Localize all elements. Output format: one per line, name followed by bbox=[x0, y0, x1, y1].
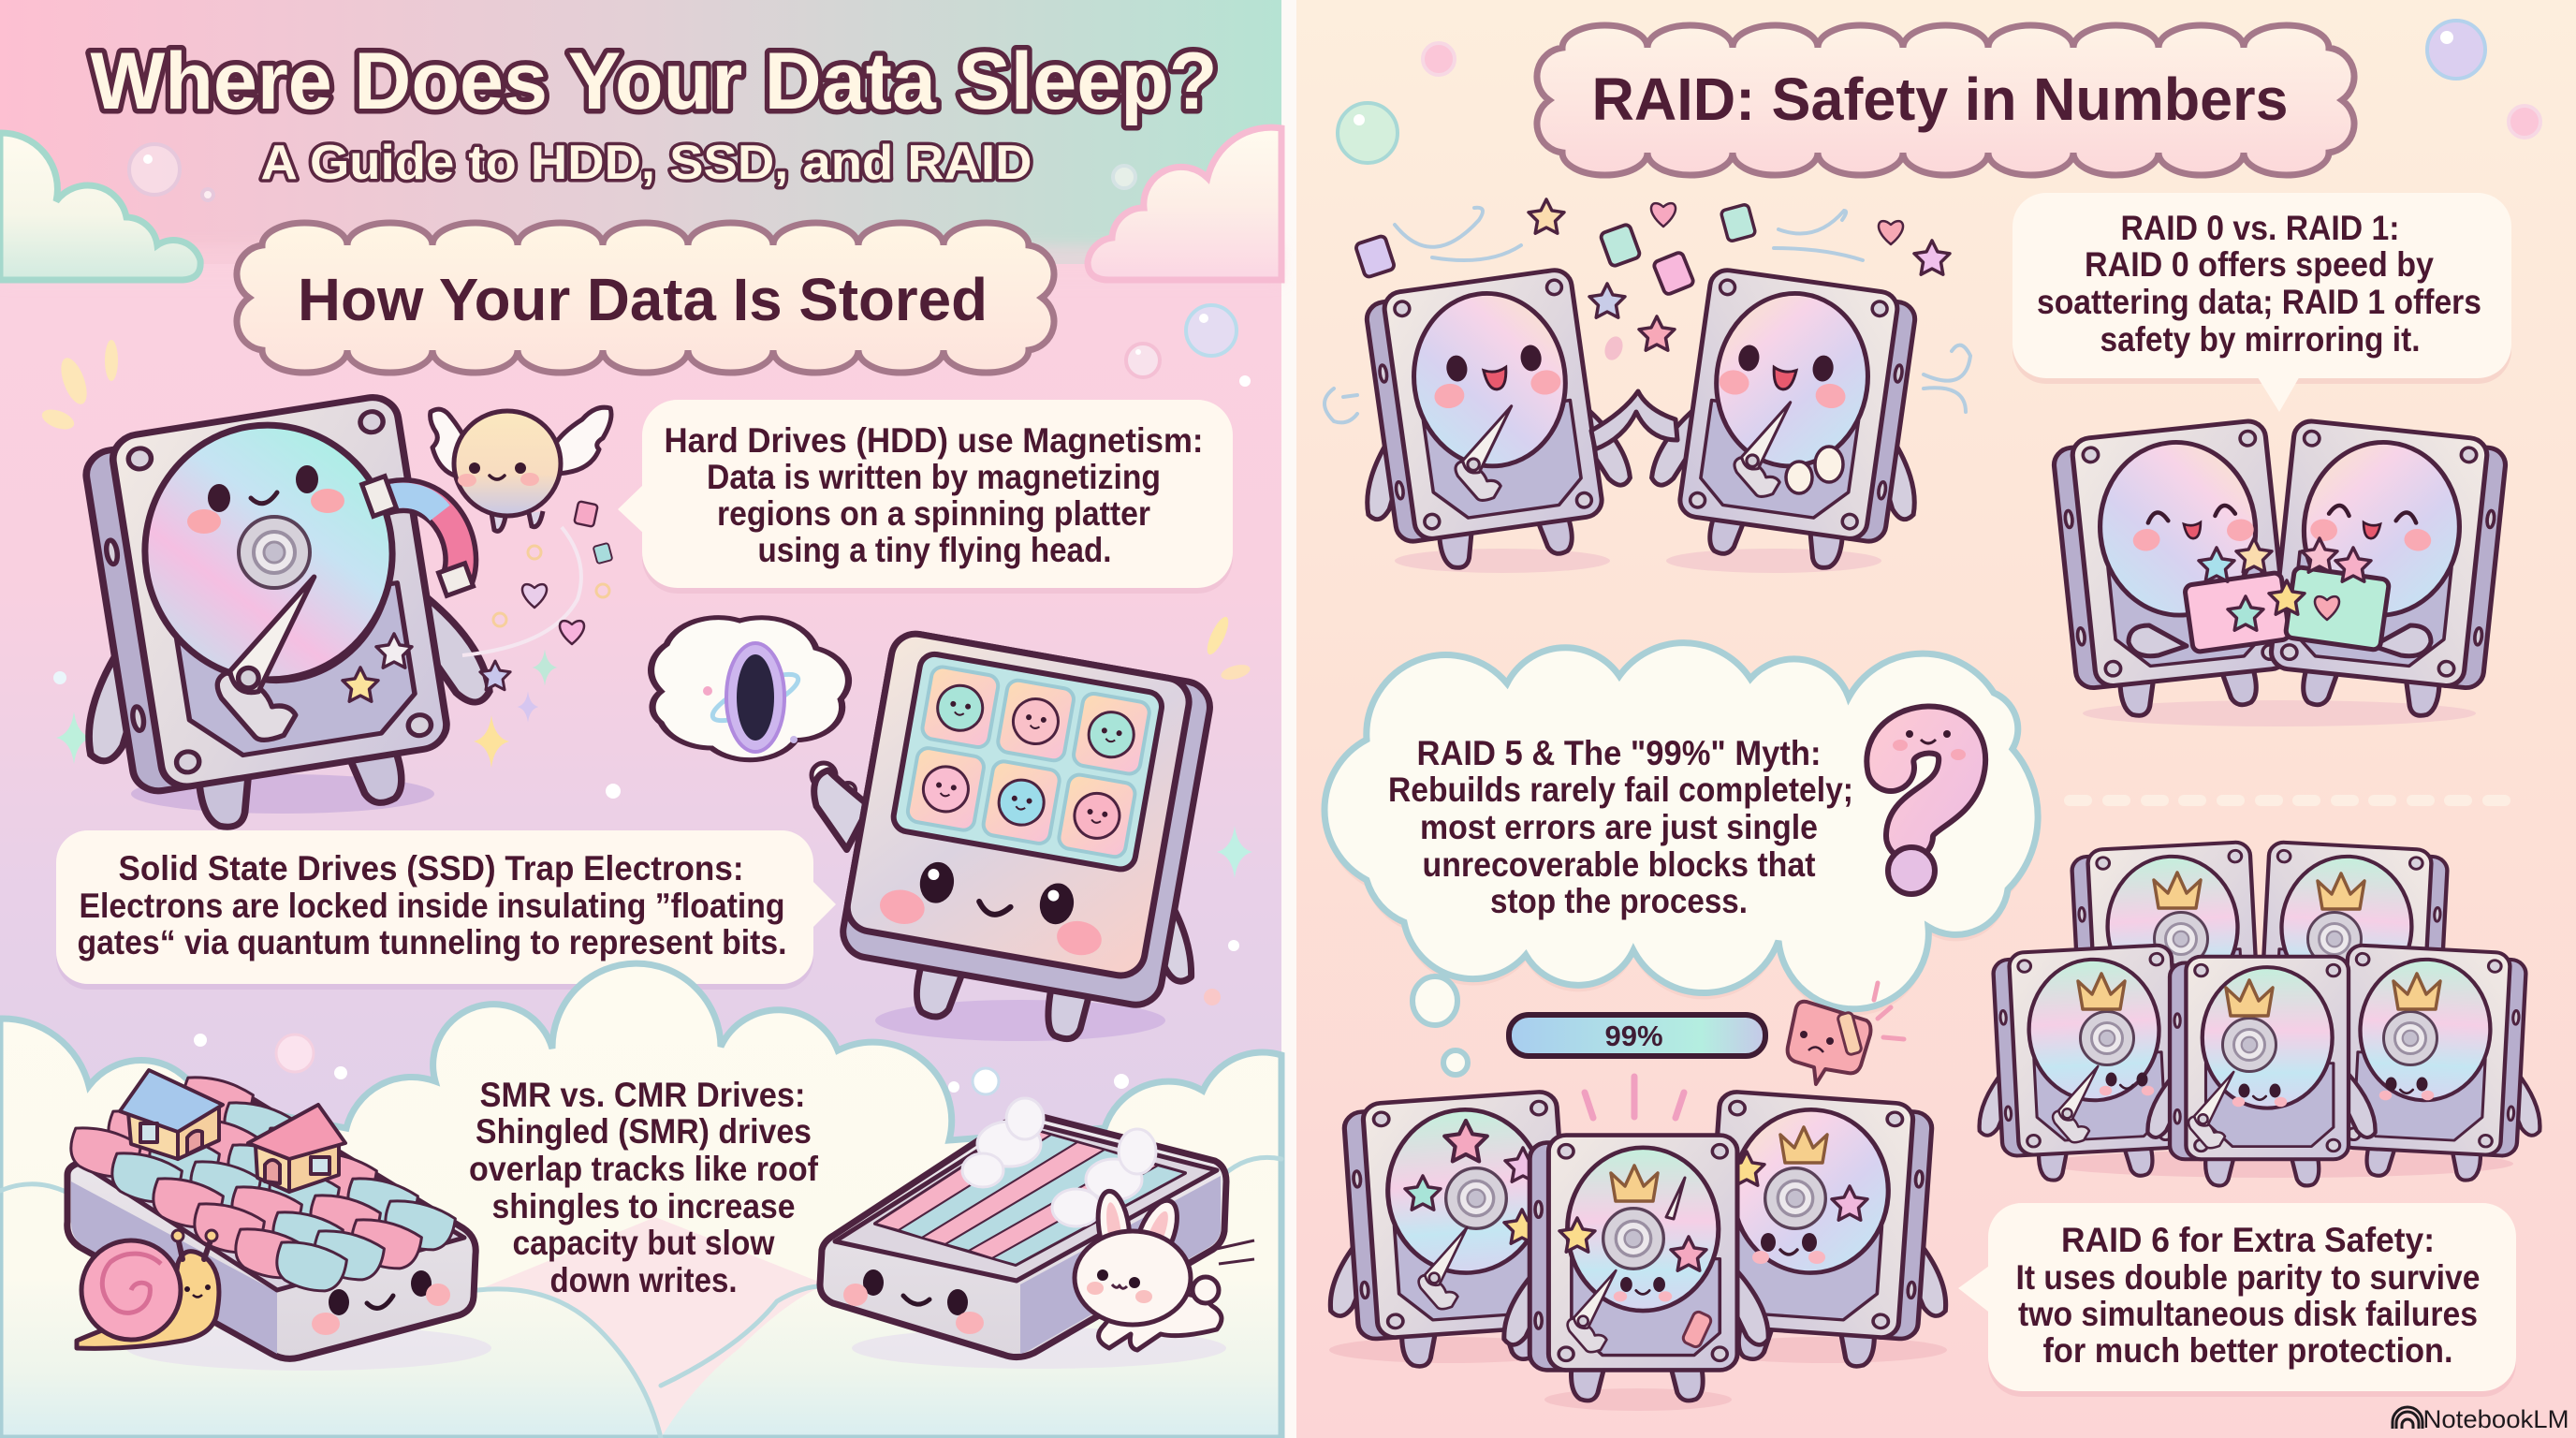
RAID 1 left drive bbox=[2052, 419, 2293, 722]
broken puffs bbox=[1786, 447, 1843, 493]
CMR side face bbox=[1020, 1176, 1221, 1354]
decorative sparkles around HDD bbox=[39, 340, 509, 768]
thought trail circles bbox=[1412, 976, 1468, 1075]
dashed divider bbox=[2064, 795, 2510, 806]
RAID 1 faces bbox=[2130, 503, 2434, 552]
RAID 5 three drives bbox=[1317, 1077, 1959, 1411]
HDD speech bubble: Hard Drives (HDD) use Magnetism: bbox=[665, 421, 1204, 460]
soap bubbles: left panel bbox=[129, 144, 1251, 1094]
RAID 0 vs RAID 1 speech bubble: soattering data; RAID 1 offers bbox=[2037, 283, 2481, 321]
RAID 0 vs RAID 1 speech bubble: safety by mirroring it. bbox=[2100, 320, 2421, 359]
iridescent platter bbox=[126, 407, 411, 697]
flying head character bbox=[431, 407, 611, 531]
stars on drive bbox=[343, 634, 412, 701]
RAID 6 speech bubble: RAID 6 for Extra Safety: bbox=[2061, 1221, 2435, 1259]
RAID 6 front middle drive bbox=[2147, 957, 2376, 1185]
platter face bbox=[187, 465, 344, 534]
HDD speech bubble: using a tiny flying head. bbox=[758, 531, 1112, 569]
subtitle: A Guide to HDD, SSD, and RAID bbox=[260, 136, 1032, 190]
SSD thought bubble with black hole bbox=[651, 618, 856, 798]
pink roof house bbox=[248, 1105, 345, 1192]
SMR drive with roof shingles bbox=[66, 1070, 491, 1371]
hard drive character bbox=[75, 394, 490, 841]
RAID 6 speech bubble: two simultaneous disk failures bbox=[2018, 1295, 2478, 1333]
bottom cloud bank bbox=[0, 963, 1281, 1438]
SMR vs CMR text: down writes. bbox=[550, 1261, 738, 1299]
RAID 5 front drive bbox=[1504, 1136, 1768, 1401]
SMR vs CMR text: shingles to increase bbox=[492, 1187, 796, 1225]
panel heading: How Your Data Is Stored: How Your Data Is Stored bbox=[298, 266, 988, 333]
SSD memory cell screen bbox=[891, 652, 1164, 872]
snail bbox=[77, 1230, 219, 1348]
RAID 5 thought cloud: most errors are just single bbox=[1420, 808, 1818, 846]
SSD face bbox=[877, 853, 1110, 959]
rays bbox=[1585, 1077, 1684, 1118]
SMR drive body bbox=[67, 1097, 476, 1358]
sad data block speech icon bbox=[1788, 983, 1904, 1084]
RAID 6 front left drive bbox=[1970, 943, 2210, 1184]
RAID 6 speech bubble: for much better protection. bbox=[2042, 1331, 2452, 1370]
RAID 6 back left drive bbox=[2071, 842, 2261, 1079]
SMR face bbox=[312, 1270, 450, 1335]
CMR data tracks bbox=[875, 1127, 1185, 1265]
bunny bbox=[1075, 1189, 1254, 1350]
RAID 0 vs RAID 1 speech bubble: RAID 0 vs. RAID 1: bbox=[2121, 209, 2400, 247]
RAID 6 speech bubble: It uses double parity to survive bbox=[2016, 1258, 2481, 1297]
RAID 5 thought cloud: RAID 5 & The "99%" Myth: bbox=[1417, 734, 1822, 772]
SMR vs CMR text bbox=[469, 1076, 819, 1299]
SMR vs CMR text: capacity but slow bbox=[513, 1224, 775, 1262]
magnetic particles bbox=[462, 501, 612, 723]
lower cloud outlines bbox=[0, 1157, 1281, 1438]
RAID 5 thought cloud: unrecoverable blocks that bbox=[1423, 845, 1816, 884]
SSD sparkles bbox=[1203, 614, 1252, 878]
RAID 5 left drive bbox=[1317, 1089, 1606, 1372]
SSD speech bubble: Electrons are locked inside insulating ”floating bbox=[79, 887, 784, 925]
background: right panel bbox=[1296, 0, 2576, 1438]
SSD legs bbox=[913, 953, 1092, 1043]
99% progress bar: 99% bbox=[1604, 1020, 1663, 1052]
99% progress bar bbox=[1509, 1015, 1765, 1056]
drive body bbox=[81, 394, 457, 841]
platter hub bbox=[239, 517, 310, 588]
RAID 0 vs RAID 1 speech bubble bbox=[2012, 193, 2511, 412]
RAID 6 back right drive bbox=[2258, 842, 2448, 1079]
white fluff clouds bbox=[962, 1098, 1156, 1226]
drive arms bbox=[75, 590, 490, 763]
magnet bbox=[362, 477, 474, 595]
SSD speech bubble: gates“ via quantum tunneling to represent bits. bbox=[77, 923, 786, 961]
SSD character bbox=[779, 621, 1241, 1060]
RAID 0 right drive bbox=[1643, 264, 1943, 580]
right sky cloud bbox=[1088, 127, 1281, 280]
SMR side face bbox=[71, 1181, 277, 1354]
RAID 5 thought cloud: stop the process. bbox=[1490, 882, 1748, 920]
shingles bbox=[66, 1072, 458, 1298]
RAID 0 faces bbox=[1429, 342, 1851, 410]
SMR top plate bbox=[82, 1103, 464, 1290]
RAID 5 thought cloud bbox=[1325, 643, 2038, 1016]
NotebookLM watermark: NotebookLM bbox=[2422, 1405, 2569, 1433]
panel heading: RAID Safety in Numbers: RAID: Safety in Numbers bbox=[1591, 66, 2288, 133]
SSD speech bubble bbox=[56, 830, 836, 990]
left sky cloud bbox=[0, 133, 200, 280]
SMR vs CMR text: Shingled (SMR) drives bbox=[476, 1112, 812, 1151]
SSD arms bbox=[792, 769, 1216, 983]
RAID 0 arms bbox=[1456, 403, 1791, 500]
question mark character bbox=[1888, 729, 1966, 894]
RAID 0 pair of drives bbox=[1339, 264, 1943, 580]
SMR vs CMR text: SMR vs. CMR Drives: bbox=[479, 1076, 805, 1114]
mirrored data boxes bbox=[2129, 538, 2431, 656]
title: Where Does Your Data Sleep? bbox=[90, 37, 1217, 126]
RAID 1 right drive bbox=[2266, 419, 2508, 722]
scattered data bbox=[1325, 199, 1970, 422]
RAID 6 group of five drives bbox=[1970, 842, 2549, 1185]
RAID 0 left drive bbox=[1339, 264, 1639, 580]
CMR drive body bbox=[820, 1113, 1226, 1357]
HDD speech bubble bbox=[618, 400, 1233, 594]
RAID 5 right drive bbox=[1670, 1089, 1959, 1372]
RAID 6 front right drive bbox=[2309, 943, 2549, 1184]
blue roof house bbox=[120, 1070, 223, 1159]
RAID 5 thought cloud: Rebuilds rarely fail completely; bbox=[1388, 770, 1853, 809]
SSD speech bubble: Solid State Drives (SSD) Trap Electrons: bbox=[118, 849, 743, 888]
SSD body bbox=[839, 630, 1214, 1009]
background: left panel bbox=[0, 0, 1281, 1438]
CMR drive with neat tracks bbox=[820, 1098, 1226, 1369]
panel heading: How Your Data Is Stored bbox=[237, 223, 1054, 373]
RAID 6 speech bubble bbox=[1958, 1203, 2516, 1397]
CMR top plate bbox=[835, 1122, 1217, 1281]
SMR vs CMR text: overlap tracks like roof bbox=[469, 1150, 819, 1188]
panel heading: RAID Safety in Numbers bbox=[1537, 25, 2354, 175]
soap bubbles: right panel bbox=[1338, 21, 2540, 163]
RAID 0 vs RAID 1 speech bubble: RAID 0 offers speed by bbox=[2085, 245, 2434, 284]
read/write arm bbox=[217, 577, 315, 740]
high five bbox=[1591, 391, 1677, 449]
pink cloud gap bbox=[477, 1217, 826, 1438]
CMR face bbox=[843, 1269, 984, 1334]
RAID 1 mirrored drives bbox=[2052, 419, 2508, 726]
HDD speech bubble: Data is written by magnetizing bbox=[707, 458, 1161, 496]
HDD speech bubble: regions on a spinning platter bbox=[717, 494, 1150, 533]
